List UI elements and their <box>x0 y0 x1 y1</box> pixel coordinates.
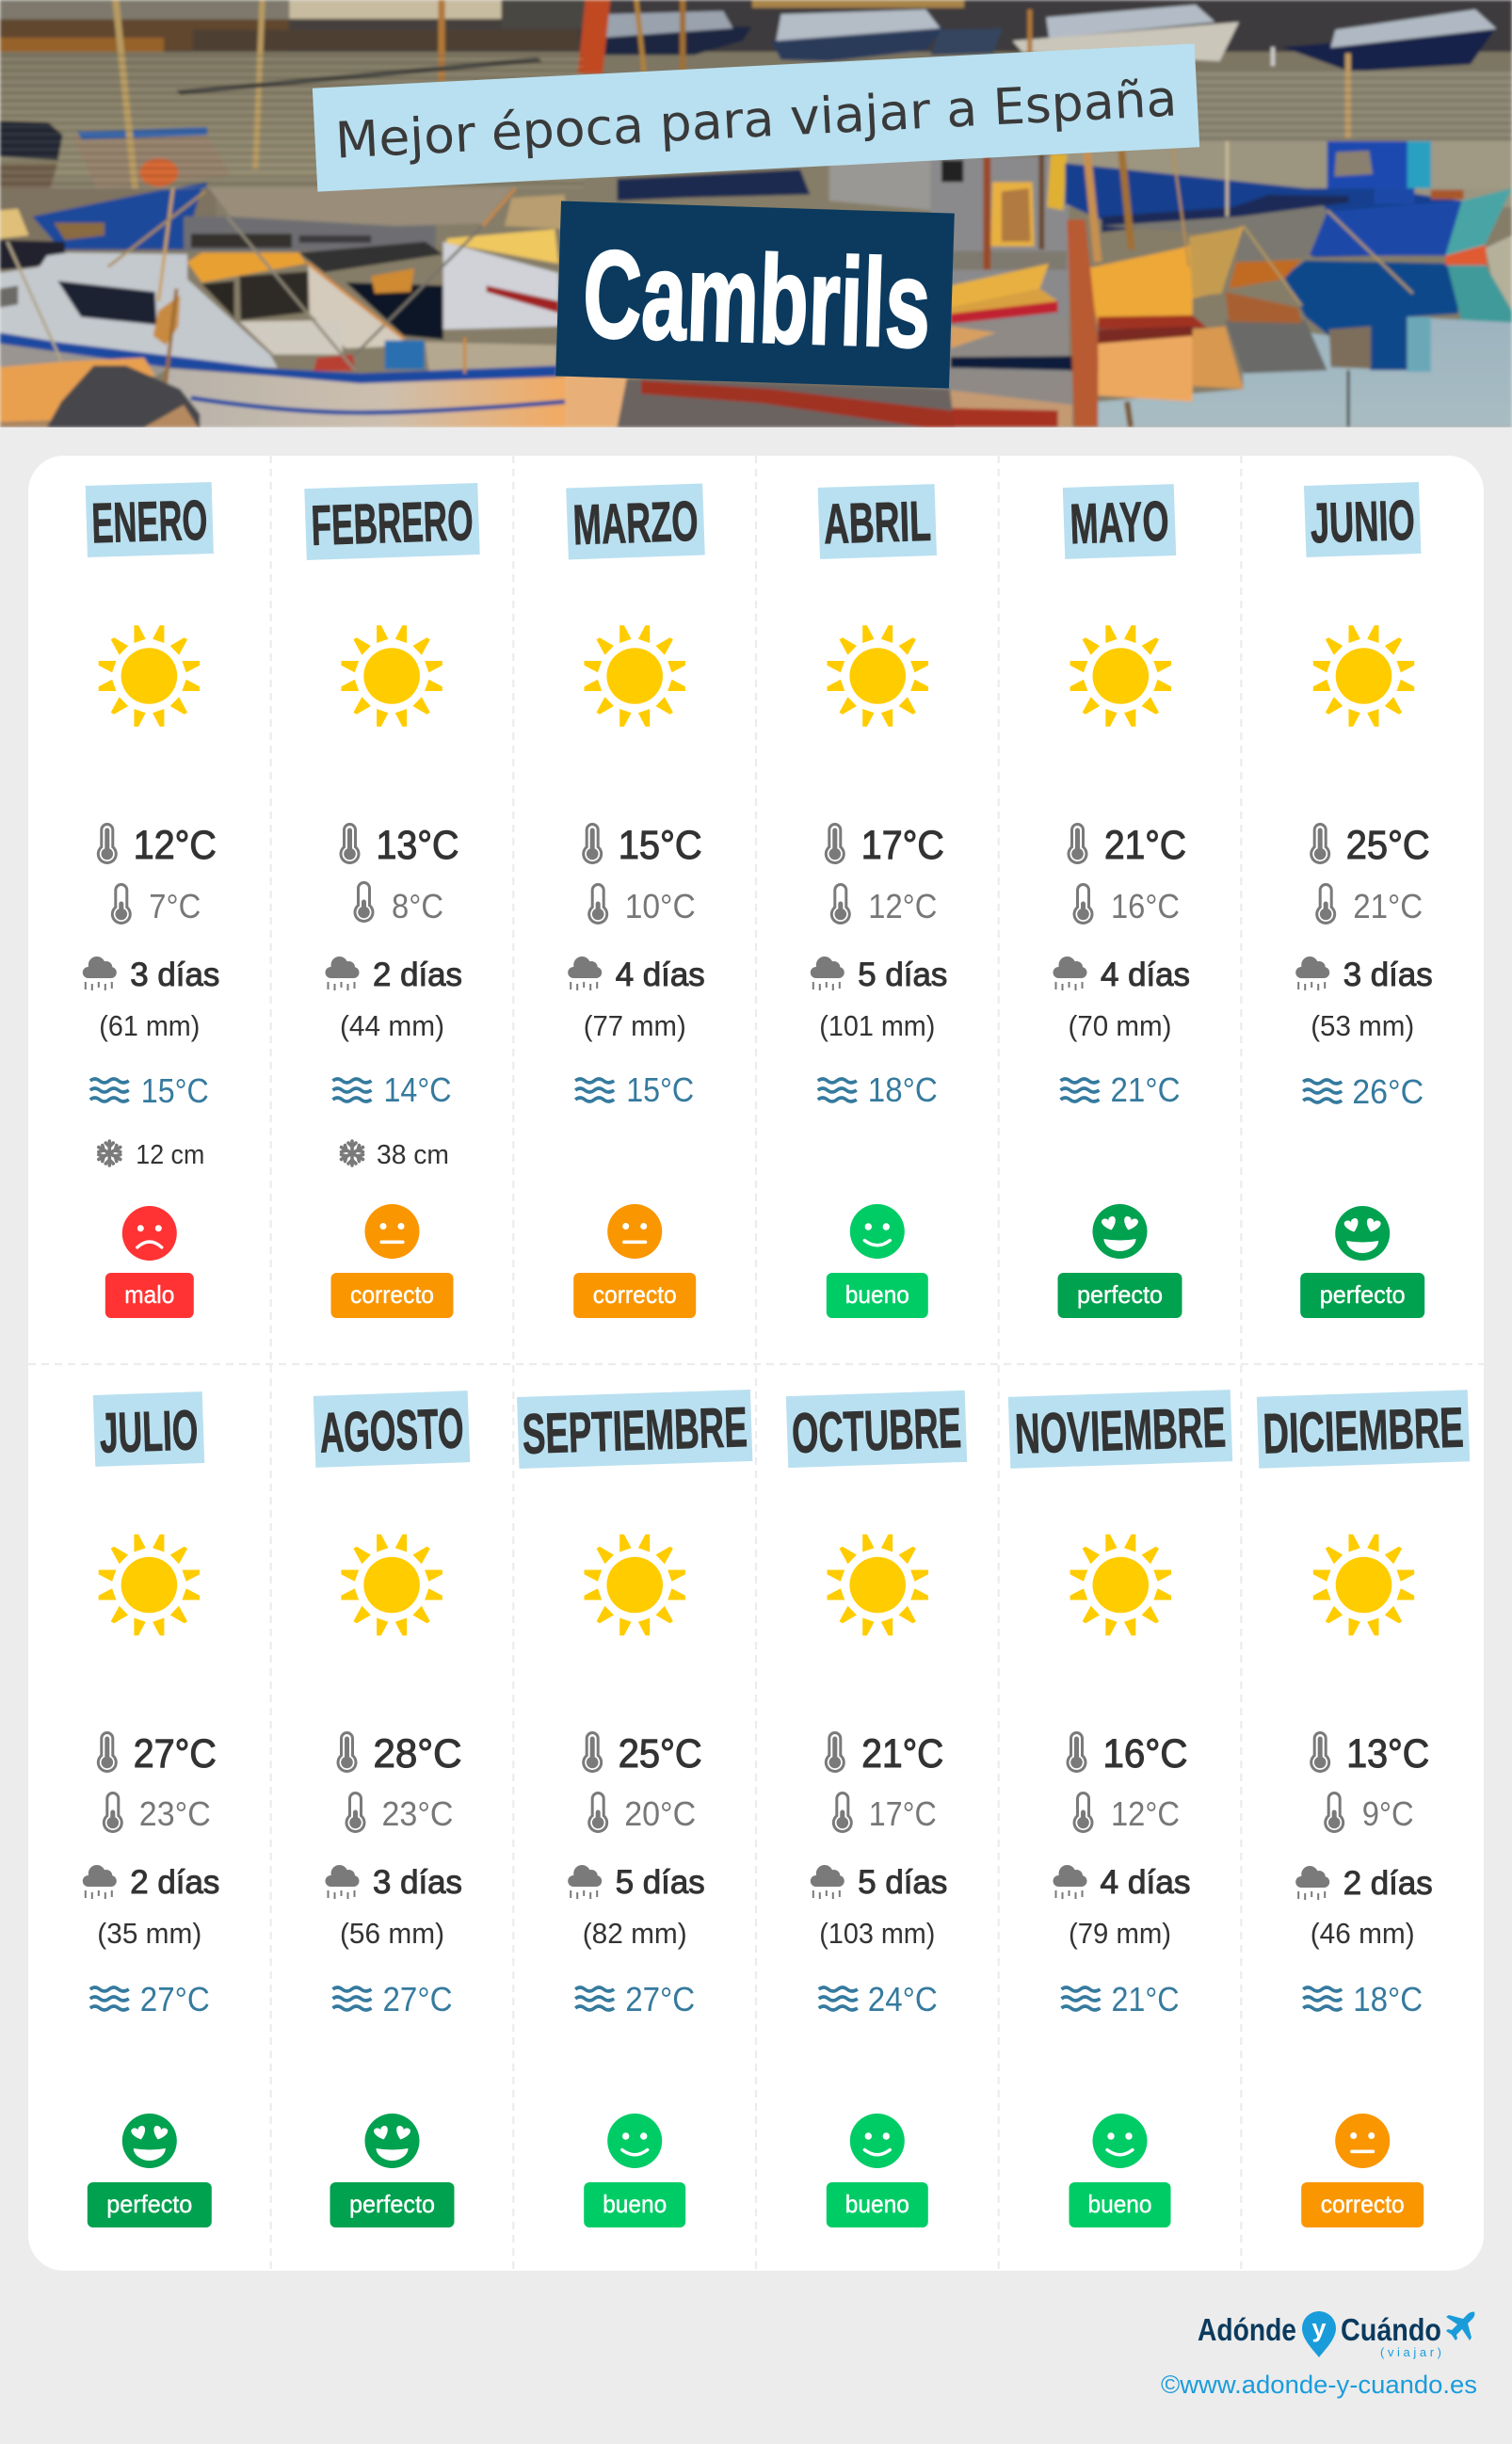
min temperature <box>1315 883 1423 925</box>
month label <box>818 484 937 559</box>
rating badge <box>105 1273 194 1318</box>
logo: Adónde y Cuándo: Cuándo <box>1341 2312 1441 2347</box>
rating badge: perfecto <box>106 2190 192 2218</box>
min temperature: 12°C <box>1111 1794 1180 1833</box>
month label <box>93 1391 204 1467</box>
rating badge <box>331 1273 454 1318</box>
max temperature <box>582 823 702 868</box>
rainy days <box>811 1864 947 1901</box>
rainy days <box>1053 957 1190 993</box>
min temperature: 7°C <box>149 887 201 925</box>
max temperature: 25°C <box>1346 823 1430 868</box>
max temperature <box>97 1731 217 1777</box>
rating badge: bueno <box>845 1280 909 1309</box>
month label: SEPTIEMBRE <box>522 1395 748 1466</box>
icon: sun <box>1070 625 1171 727</box>
month column: junio <box>1295 482 1433 1318</box>
sea temperature <box>90 1980 210 2018</box>
logo: Adónde y Cuándo: Adónde <box>1198 2312 1296 2347</box>
min temperature: 12°C <box>868 887 937 925</box>
rainfall: (46 mm) <box>1311 1917 1415 1950</box>
month column: octubre <box>786 1391 967 2227</box>
rainy days <box>568 1864 705 1901</box>
rainfall: (44 mm) <box>340 1009 444 1042</box>
min temperature: 17°C <box>869 1794 937 1833</box>
min temperature <box>587 883 696 925</box>
rating badge: correcto <box>593 1280 677 1309</box>
min temperature: 8°C <box>392 887 443 925</box>
rainfall: (103 mm) <box>819 1917 935 1950</box>
min temperature: 10°C <box>625 887 696 925</box>
icon: face rating <box>365 2114 420 2168</box>
max temperature: 25°C <box>619 1731 702 1777</box>
month label <box>566 483 705 560</box>
banner: subtitle: Mejor época para viajar a España <box>334 70 1179 170</box>
month column: abril <box>811 484 947 1318</box>
rating badge <box>1301 2182 1424 2227</box>
icon: face rating <box>1335 1206 1390 1261</box>
snow: 12 cm <box>136 1140 204 1170</box>
banner: city title: Cambrils <box>581 224 933 374</box>
rainy days: 3 días <box>373 1864 462 1901</box>
snow: 38 cm <box>377 1140 449 1170</box>
month label: ENERO <box>90 489 208 555</box>
min temperature <box>111 883 201 925</box>
banner: subtitle <box>313 43 1199 192</box>
sea temperature <box>333 1980 452 2018</box>
rainfall: (56 mm) <box>340 1917 444 1950</box>
rainy days <box>326 957 462 993</box>
icon: sun <box>341 1535 442 1635</box>
rating badge <box>1070 2182 1171 2227</box>
min temperature: 23°C <box>139 1794 211 1833</box>
min temperature: 16°C <box>1111 887 1180 925</box>
rainfall: (53 mm) <box>1311 1009 1414 1042</box>
banner: city title <box>555 201 955 389</box>
icon: face rating <box>1092 2114 1147 2168</box>
min temperature <box>354 881 443 925</box>
rainy days <box>83 957 219 993</box>
max temperature <box>337 1731 461 1777</box>
month label <box>1304 482 1421 557</box>
max temperature: 12°C <box>134 823 217 868</box>
panel: climate calendar card <box>28 456 1484 2271</box>
rainfall: (70 mm) <box>1068 1009 1171 1042</box>
min temperature: 21°C <box>1353 887 1423 925</box>
snow <box>341 1140 449 1170</box>
month label: ABRIL <box>823 490 932 555</box>
sea temperature <box>1303 1072 1424 1111</box>
sea temperature <box>1062 1980 1179 2018</box>
month column: enero <box>83 482 219 1318</box>
month label: JUNIO <box>1310 489 1416 555</box>
sea temperature: 26°C <box>1352 1072 1424 1111</box>
icon: face rating <box>1092 1204 1147 1259</box>
max temperature <box>582 1731 702 1777</box>
rainfall: (61 mm) <box>99 1009 200 1042</box>
icon: airplane <box>1446 2312 1475 2340</box>
max temperature <box>97 823 217 868</box>
sea temperature: 27°C <box>382 1980 452 2018</box>
sea temperature: 14°C <box>384 1070 452 1109</box>
rainy days: 5 días <box>858 957 947 993</box>
rainy days: 4 días <box>616 957 705 993</box>
sea temperature: 15°C <box>141 1071 209 1110</box>
month label: NOVIEMBRE <box>1014 1395 1227 1466</box>
rating badge <box>1058 1273 1182 1318</box>
rainy days <box>1295 957 1433 993</box>
max temperature <box>1310 823 1430 868</box>
rainfall: (77 mm) <box>584 1009 686 1042</box>
rating badge: perfecto <box>349 2190 435 2218</box>
rainy days <box>811 957 947 993</box>
icon: sun <box>584 625 685 727</box>
icon: face rating <box>850 2114 905 2168</box>
icon: face rating <box>607 1204 662 1259</box>
month label: AGOSTO <box>318 1396 465 1465</box>
icon: sun <box>827 625 928 727</box>
month column: diciembre <box>1257 1390 1470 2227</box>
min temperature <box>1073 883 1180 925</box>
icon: face rating <box>122 1206 177 1261</box>
month column: agosto <box>314 1391 470 2227</box>
max temperature <box>825 1731 943 1777</box>
icon: sun <box>1070 1535 1171 1635</box>
icon: sun <box>1313 1535 1414 1635</box>
sea temperature <box>575 1980 695 2018</box>
rainfall: (82 mm) <box>583 1917 687 1950</box>
min temperature: 23°C <box>382 1794 454 1833</box>
icon: sun <box>584 1535 685 1635</box>
icon: face rating <box>607 2114 662 2168</box>
rainy days: 2 días <box>130 1864 219 1901</box>
rainy days <box>326 1864 462 1901</box>
sea temperature <box>90 1071 209 1110</box>
min temperature: 9°C <box>1362 1794 1414 1833</box>
min temperature <box>830 883 937 925</box>
month label <box>1008 1390 1232 1469</box>
sea temperature <box>333 1070 452 1109</box>
icon: face rating <box>365 1204 420 1259</box>
month label: OCTUBRE <box>791 1396 962 1465</box>
sea temperature <box>1060 1070 1181 1109</box>
max temperature <box>1068 823 1186 868</box>
sea temperature: 18°C <box>868 1070 938 1109</box>
icon: sun <box>827 1535 928 1635</box>
icon: sun <box>99 1535 200 1635</box>
max temperature: 13°C <box>1346 1731 1429 1777</box>
sea temperature <box>818 1070 938 1109</box>
sea temperature: 15°C <box>626 1070 694 1109</box>
rating badge: perfecto <box>1320 1280 1406 1309</box>
header photo: fishing boats in the harbour <box>0 0 1512 427</box>
month label: MAYO <box>1069 490 1170 555</box>
sea temperature: 21°C <box>1111 1070 1181 1109</box>
min temperature: 20°C <box>624 1794 696 1833</box>
rainy days: 5 días <box>858 1864 947 1901</box>
month column: noviembre <box>1008 1390 1232 2227</box>
logo: Adónde y Cuándo: (viajar) <box>1380 2345 1441 2359</box>
max temperature <box>825 823 944 868</box>
icon: face rating <box>1335 2114 1390 2168</box>
max temperature: 13°C <box>377 823 459 868</box>
max temperature: 21°C <box>1104 823 1186 868</box>
month column: marzo <box>566 483 705 1318</box>
sea temperature: 27°C <box>140 1980 210 2018</box>
rating badge: correcto <box>350 1280 434 1309</box>
rating badge <box>1300 1273 1424 1318</box>
snow <box>99 1140 204 1170</box>
month label <box>304 483 480 560</box>
rating badge: perfecto <box>1077 1280 1163 1309</box>
rainfall: (35 mm) <box>97 1917 201 1950</box>
min temperature <box>832 1792 937 1833</box>
rainy days: 3 días <box>1343 957 1433 993</box>
sea temperature <box>819 1980 938 2018</box>
month label: MARZO <box>571 490 700 556</box>
icon: map pin <box>1302 2311 1336 2357</box>
max temperature: 27°C <box>134 1731 217 1777</box>
max temperature <box>339 823 459 868</box>
rating badge <box>584 2182 685 2227</box>
rating badge <box>573 1273 696 1318</box>
min temperature <box>345 1792 454 1833</box>
rainy days <box>568 957 705 993</box>
icon: face rating <box>122 2114 177 2168</box>
rating badge: malo <box>124 1280 174 1309</box>
sea temperature <box>575 1070 694 1109</box>
max temperature: 15°C <box>619 823 702 868</box>
rating badge <box>827 2182 928 2227</box>
month column: julio <box>83 1391 219 2227</box>
sea temperature: 18°C <box>1353 1980 1423 2018</box>
rainy days: 2 días <box>1343 1865 1433 1902</box>
rainy days <box>1053 1864 1190 1901</box>
rainfall: (79 mm) <box>1069 1917 1171 1950</box>
sea temperature: 21°C <box>1111 1980 1179 2018</box>
month label <box>86 482 214 557</box>
month column: mayo <box>1053 484 1190 1318</box>
max temperature: 16°C <box>1103 1731 1188 1777</box>
rainy days: 5 días <box>616 1864 705 1901</box>
website credit: ©www.adonde-y-cuando.es <box>1161 2371 1477 2399</box>
sea temperature <box>1303 1980 1423 2018</box>
month label <box>786 1391 967 1468</box>
month label <box>517 1390 752 1469</box>
rainy days: 4 días <box>1101 957 1190 993</box>
rainfall: (101 mm) <box>819 1009 935 1042</box>
max temperature: 21°C <box>861 1731 943 1777</box>
min temperature <box>1073 1792 1180 1833</box>
rainy days <box>1295 1865 1433 1902</box>
sea temperature: 24°C <box>868 1980 938 2018</box>
rating badge: bueno <box>603 2190 667 2218</box>
rainy days: 2 días <box>373 957 462 993</box>
min temperature <box>1324 1792 1414 1833</box>
max temperature <box>1066 1731 1188 1777</box>
month column: febrero <box>304 483 480 1318</box>
sea temperature: 27°C <box>625 1980 695 2018</box>
month label <box>314 1391 470 1468</box>
icon: sun <box>1313 625 1414 727</box>
month label: FEBRERO <box>310 489 475 557</box>
icon: sun <box>99 625 200 727</box>
month label: JULIO <box>99 1398 199 1465</box>
rainy days <box>83 1864 219 1901</box>
month column: septiembre <box>517 1390 752 2227</box>
icon: sun <box>341 625 442 727</box>
rainy days: 3 días <box>130 957 219 993</box>
max temperature <box>1310 1731 1429 1777</box>
max temperature: 28°C <box>373 1731 461 1777</box>
month label <box>1063 484 1176 559</box>
rating badge <box>330 2182 454 2227</box>
rating badge <box>827 1273 928 1318</box>
rainy days: 4 días <box>1100 1864 1190 1901</box>
icon: map pin: y <box>1311 2314 1327 2342</box>
rating badge: correcto <box>1321 2190 1405 2218</box>
rating badge: bueno <box>1088 2190 1152 2218</box>
logo: Adónde y Cuándo <box>1198 2311 1475 2359</box>
min temperature <box>587 1792 696 1833</box>
rating badge: bueno <box>845 2190 909 2218</box>
min temperature <box>103 1792 211 1833</box>
max temperature: 17°C <box>861 823 944 868</box>
rating badge <box>88 2182 212 2227</box>
icon: face rating <box>850 1204 905 1259</box>
